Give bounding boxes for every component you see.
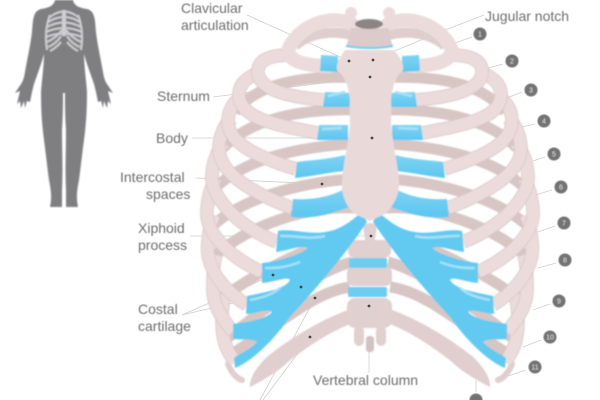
labels: Sternum [157, 88, 210, 104]
rib 12 [390, 310, 512, 387]
rib number badges: 8 [563, 258, 567, 264]
labels: Jugular notch [485, 8, 569, 24]
labels: Xiphoid [138, 220, 185, 236]
labels: spaces [146, 186, 190, 202]
rib number badges: 10 [546, 334, 554, 342]
labels: Clavicular [181, 0, 243, 16]
body silhouette figure [15, 0, 113, 207]
rib 1 [383, 7, 451, 66]
rib number badges: 9 [557, 298, 561, 306]
rib number badges [470, 28, 572, 400]
jugular opening [355, 19, 383, 29]
back ribs [372, 77, 532, 352]
labels: cartilage [138, 318, 191, 334]
leader lines [182, 15, 556, 400]
front ribs [416, 55, 533, 362]
blue disc line [346, 46, 393, 48]
anchor dots [272, 59, 374, 338]
rib number badges: 3 [529, 88, 533, 94]
vertebral column [347, 223, 392, 352]
labels: Body [156, 130, 188, 146]
rib number badges: 2 [510, 58, 514, 66]
rib number badges: 6 [559, 184, 563, 192]
rib number badges: 5 [552, 152, 556, 158]
labels: Intercostal [120, 169, 185, 185]
rib number badges: 11 [531, 364, 539, 372]
labels: Costal [138, 301, 178, 317]
labels [120, 0, 569, 388]
labels: articulation [181, 17, 249, 33]
rib number badges: 4 [542, 118, 546, 126]
sternum [337, 50, 403, 221]
rib cage illustration [207, 7, 533, 387]
labels: Vertebral column [313, 372, 418, 388]
mini rib cage [46, 10, 82, 51]
rib number badges: 7 [562, 220, 566, 228]
rib number badges: 1 [478, 32, 482, 38]
manubrium collar [346, 28, 393, 47]
labels: process [138, 237, 187, 253]
costal cartilage, blue [373, 55, 507, 368]
